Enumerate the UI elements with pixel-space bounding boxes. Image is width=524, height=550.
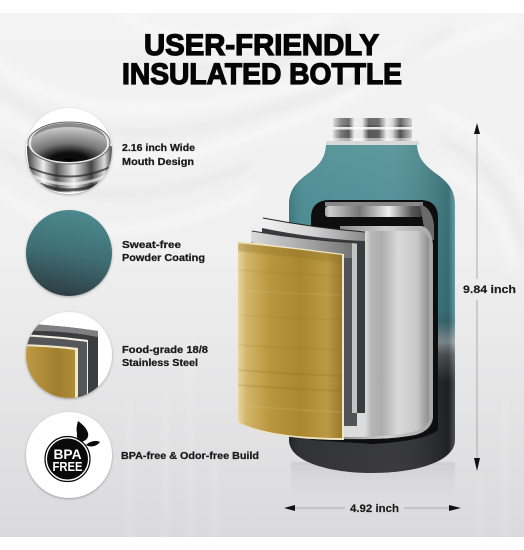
icon: BPA free badge: FREE xyxy=(52,459,83,474)
icon: leaves xyxy=(77,421,100,446)
feature label: wide mouth: 2.16 inch Wide xyxy=(122,143,195,154)
feature label: powder coating xyxy=(122,240,205,264)
bottle neck xyxy=(326,118,419,145)
feature label: powder coating: Powder Coating xyxy=(122,253,205,264)
title: USER-FRIENDLY xyxy=(144,29,379,62)
feature label: wide mouth xyxy=(122,143,195,168)
width label: 4.92 inch xyxy=(350,503,399,515)
bottle floor shadow xyxy=(291,462,455,506)
icon: BPA free badge xyxy=(26,412,112,498)
feature label: wide mouth: Mouth Design xyxy=(122,157,194,168)
inner steel wall xyxy=(340,226,433,439)
icon: BPA free badge: BPA xyxy=(54,446,82,462)
insulation layer 2 xyxy=(251,231,357,426)
gold copper layer xyxy=(238,241,344,440)
icon: wide mouth circle xyxy=(26,108,112,194)
width dimension arrow xyxy=(284,505,461,511)
icon: powder coating swatch xyxy=(26,210,112,296)
feature label: BPA free: BPA-free & Odor-free Build xyxy=(121,451,259,462)
title: INSULATED BOTTLE xyxy=(122,58,402,91)
bottle cut-away window xyxy=(311,200,438,444)
feature label: stainless steel: Food-grade 18/8 xyxy=(122,345,208,356)
insulation layer 3 xyxy=(262,218,365,413)
feature label: stainless steel: Stainless Steel xyxy=(122,358,198,369)
bottle xyxy=(238,118,455,473)
feature label: stainless steel xyxy=(122,345,208,369)
bottle body xyxy=(289,145,455,473)
height dimension arrow xyxy=(474,123,480,471)
icon: stainless steel layers xyxy=(20,312,112,398)
feature label: powder coating: Sweat-free xyxy=(122,240,182,251)
height label: 9.84 inch xyxy=(463,284,516,296)
title xyxy=(122,29,402,91)
